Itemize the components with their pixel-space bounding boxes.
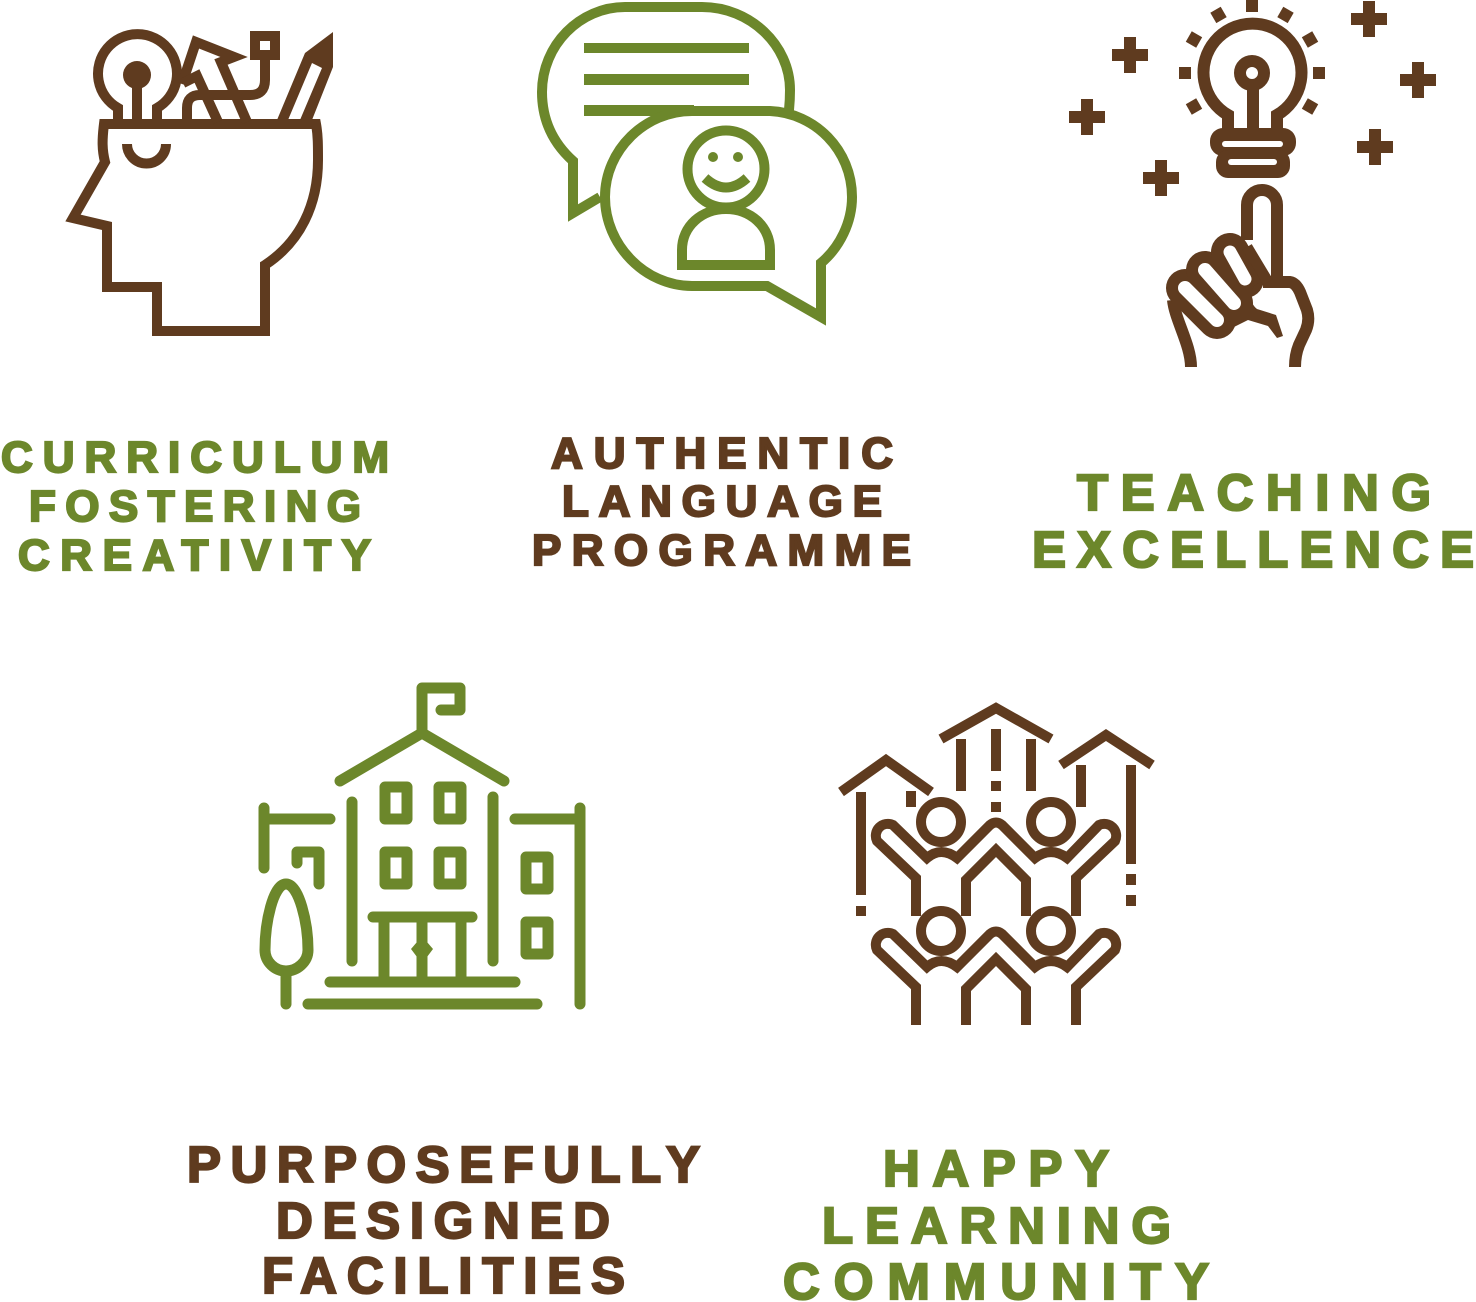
icon: head with ideas — [73, 32, 333, 331]
title: purposefully designed facilities — [187, 1136, 700, 1302]
title: happy learning community: HAPPY — [883, 1140, 1109, 1197]
icon: community people and houses — [841, 708, 1152, 1025]
title: authentic language programme: AUTHENTIC — [551, 429, 893, 478]
title: happy learning community — [783, 1140, 1209, 1302]
title: teaching excellence: TEACHING — [1077, 464, 1431, 521]
icon: school building — [264, 688, 580, 1004]
title: teaching excellence — [1032, 464, 1474, 578]
panel: happy learning community — [783, 708, 1209, 1302]
panel: purposefully designed facilities — [187, 688, 700, 1302]
panel: teaching excellence — [1032, 0, 1474, 578]
title: teaching excellence: EXCELLENCE — [1032, 521, 1474, 578]
title: authentic language programme — [532, 429, 911, 575]
title: curriculum fostering creativity: CREATIVITY — [18, 531, 371, 580]
panel: curriculum fostering creativity — [1, 32, 389, 580]
title: authentic language programme: LANGUAGE — [562, 477, 882, 526]
title: purposefully designed facilities: DESIGNED — [276, 1192, 610, 1249]
title: curriculum fostering creativity — [1, 433, 389, 580]
title: authentic language programme: PROGRAMME — [532, 526, 911, 575]
panel: authentic language programme — [532, 7, 911, 575]
title: curriculum fostering creativity: FOSTERING — [29, 482, 361, 531]
icon: light bulb above finger — [1069, 0, 1436, 367]
title: happy learning community: LEARNING — [822, 1197, 1171, 1254]
title: purposefully designed facilities: PURPOSEFULLY — [187, 1136, 700, 1193]
title: curriculum fostering creativity: CURRICULUM — [1, 433, 389, 482]
icon: speech bubbles — [542, 7, 852, 317]
